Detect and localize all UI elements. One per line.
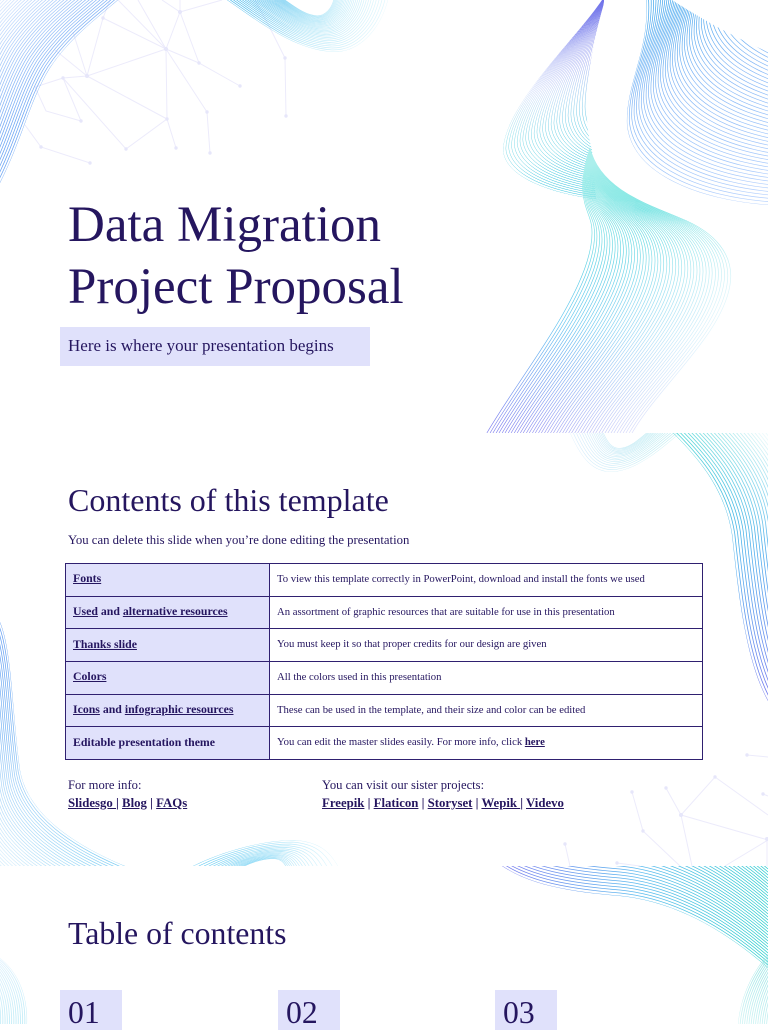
row: icons <box>66 695 586 726</box>
number 02: 02 <box>286 995 318 1030</box>
number 02 <box>278 990 340 1030</box>
row: fonts: Fonts <box>73 571 101 585</box>
wave: top centre <box>225 0 390 55</box>
row: colors: Colors <box>73 669 106 683</box>
row: thanks slide: Thanks slide <box>73 637 137 651</box>
number 03: 03 <box>503 995 535 1030</box>
row: thanks slide: You must keep it so that proper credits for our design are given <box>277 638 547 650</box>
row: fonts <box>66 564 645 759</box>
heading: table of contents: Table of contents <box>68 916 287 951</box>
wave: slide 2 bottom centre <box>193 840 338 866</box>
sister projects links: You can visit our sister projects: <box>322 778 484 792</box>
heading: contents of this template: Contents of this template <box>68 482 389 518</box>
text: Project Proposal <box>68 259 404 315</box>
wave: slide 2 left <box>0 620 126 866</box>
number 01: 01 <box>68 995 100 1030</box>
contents table <box>65 563 703 760</box>
wave: right loop <box>500 0 610 200</box>
row: resources: An assortment of graphic resources that are suitable for use in this presentation <box>277 606 615 618</box>
row: editable theme <box>66 727 545 759</box>
subtitle box <box>60 327 370 366</box>
more info links: Slidesgo | Blog | FAQs <box>68 796 187 810</box>
row: icons: These can be used in the template, and their size and color can be edited <box>277 704 585 716</box>
network: top left <box>25 0 288 165</box>
row: editable theme: Editable presentation theme <box>73 735 215 749</box>
row: thanks slide <box>66 629 547 661</box>
wave: centre ribbon <box>485 145 735 433</box>
wave: slide 3 left <box>0 958 28 1024</box>
row: resources <box>66 597 615 628</box>
more info links: For more info: <box>68 778 141 792</box>
wave: slide 2 small top <box>568 433 682 473</box>
wave: slide 3 top right <box>500 866 768 970</box>
subtitle box: Here is where your presentation begins <box>68 336 334 355</box>
wave: top left corner <box>0 0 120 185</box>
sister projects links: Freepik | Flaticon | Storyset | Wepik | Videvo <box>322 796 564 810</box>
title: Data Migration <box>68 197 381 253</box>
row: resources: Used and alternative resources <box>73 604 228 618</box>
row: fonts: To view this template correctly in PowerPoint, download and install the fonts we used <box>277 573 645 585</box>
sister projects links <box>322 778 564 810</box>
wave: top right <box>625 0 768 206</box>
row: editable theme: You can edit the master slides easily. For more info, click here <box>277 736 545 748</box>
network: slide 2 bottom right <box>563 753 768 866</box>
row: colors <box>66 662 442 694</box>
wave: slide 3 right <box>736 952 768 1024</box>
number 01 <box>60 990 122 1030</box>
row: colors: All the colors used in this presentation <box>277 671 441 683</box>
title <box>68 197 404 315</box>
text: delete this slide note: You can delete this slide when you’re done editing the presentation <box>68 533 409 547</box>
number 03 <box>495 990 557 1030</box>
wave: slide 2 right <box>670 433 768 703</box>
more info links <box>68 778 188 810</box>
row: icons: Icons and infographic resources <box>73 702 234 716</box>
